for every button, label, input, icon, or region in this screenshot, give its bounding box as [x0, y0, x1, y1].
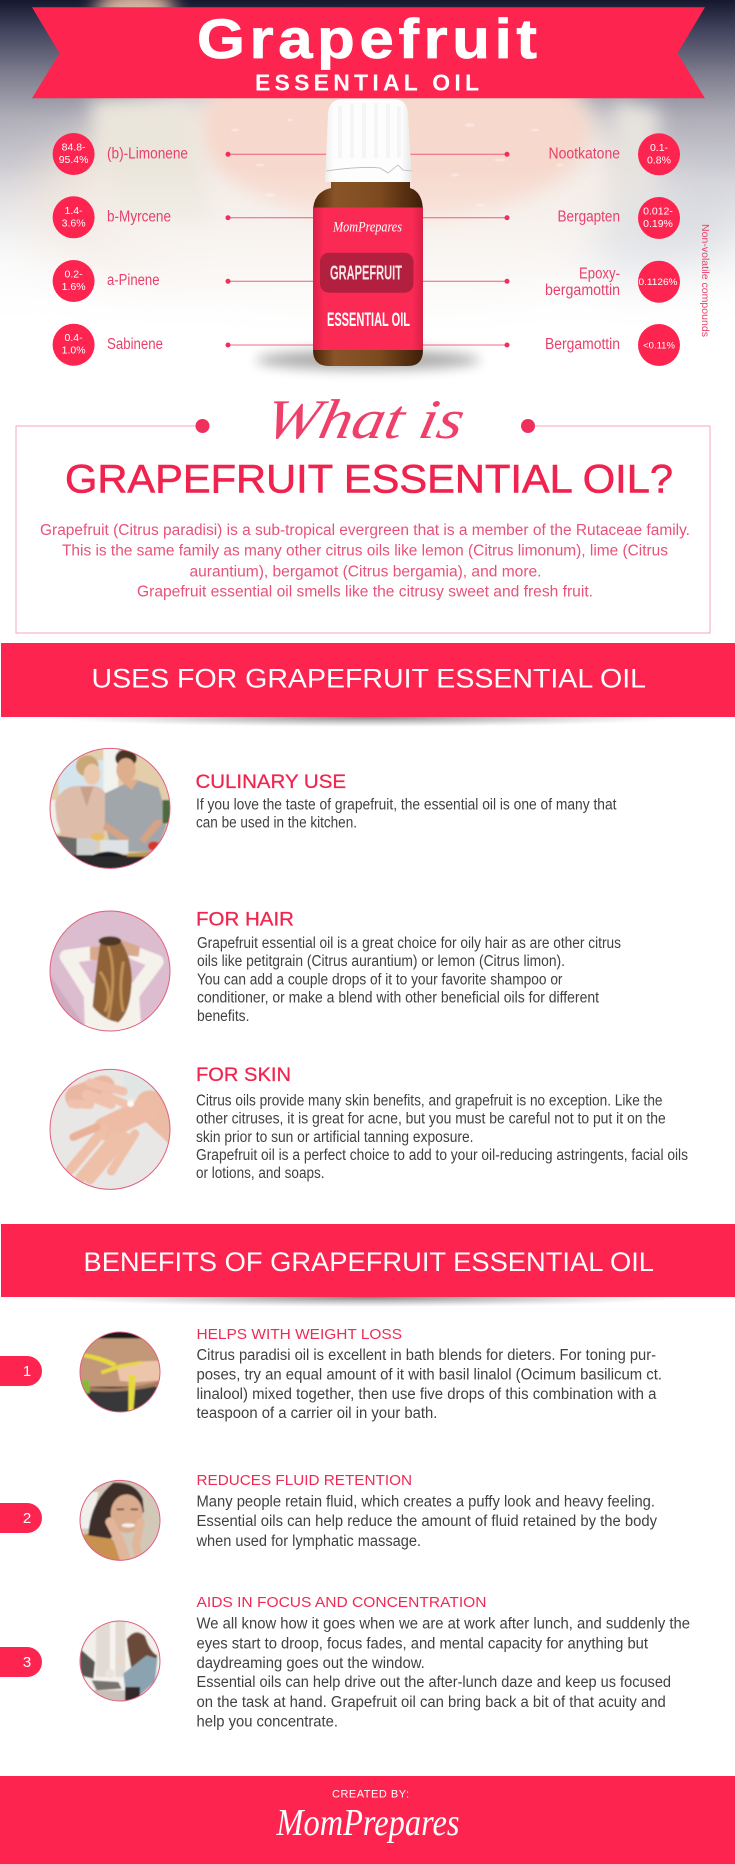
body text: when used for lymphatic massage.: [196, 1533, 421, 1550]
heading: HELPS WITH WEIGHT LOSS: [196, 1326, 402, 1343]
frame dot right: [521, 419, 535, 433]
compound: limonene: (b)-Limonene: [107, 146, 188, 162]
photo: hands applying cream: [50, 1068, 170, 1190]
benefit 3: focus: [0, 1594, 690, 1731]
compound: bergamottin: Bergamottin: [545, 336, 620, 353]
compound: bergamottin: <0.11%: [643, 340, 675, 352]
body text: [196, 1347, 662, 1422]
body text: on the task at hand. Grapefruit oil can bring back a bit of that acuity and: [196, 1694, 666, 1711]
bottle shadow: [256, 350, 480, 370]
photo: woman with long hair: [50, 910, 170, 1032]
body text: daydreaming goes out the window.: [196, 1655, 425, 1672]
frame dot left: [196, 419, 210, 433]
body text: Essential oils can help drive out the after-lunch daze and keep us focused: [196, 1674, 671, 1691]
body text: skin prior to sun or artificial tanning exposure.: [196, 1129, 474, 1146]
bottle sublabel: ESSENTIAL OIL: [327, 310, 410, 331]
compound: myrcene: 1.4-: [65, 205, 83, 217]
footer logo: MomPrepares: [276, 1802, 460, 1844]
use: culinary: [50, 748, 616, 869]
number tab: [0, 1647, 42, 1677]
bottle name plate: GRAPEFRUIT: [330, 262, 402, 284]
script heading: What is: [259, 390, 470, 451]
body text: eyes start to droop, focus fades, and mental capacity for anything but: [196, 1635, 649, 1652]
credit label: CREATED BY:: [332, 1788, 409, 1800]
compound: sabinene: 0.4-: [65, 332, 83, 344]
compound: pinene: a-Pinene: [107, 272, 160, 289]
paragraph: Grapefruit essential oil smells like the citrusy sweet and fresh fruit.: [137, 584, 593, 601]
compound: epoxybergamottin: Epoxy-: [579, 265, 620, 282]
compound: bergamottin: [545, 324, 680, 366]
photo: smiling woman: [80, 1480, 160, 1561]
compound: nootkatone: Nootkatone: [548, 146, 620, 162]
body text: other citruses, it is great for acne, but you must be careful not to put it on the: [196, 1111, 666, 1128]
body text: Many people retain fluid, which creates a puffy look and heavy feeling.: [196, 1494, 655, 1511]
body text: oils like petitgrain (Citrus aurantium) or lemon (Citrus limon).: [197, 953, 565, 970]
bottle name plate: [320, 253, 414, 293]
heading: FOR HAIR: [196, 910, 294, 931]
frame: [16, 426, 710, 633]
compound: sabinene: Sabinene: [107, 336, 163, 353]
number tab: 2: [23, 1510, 31, 1527]
body text: Citrus paradisi oil is excellent in bath blends for dieters. For toning pur-: [196, 1347, 656, 1364]
bottle cap: [325, 99, 412, 182]
connector lines from bottle to compounds: [226, 152, 510, 348]
title ribbon: [32, 7, 705, 98]
compound: limonene: 95.4%: [59, 154, 88, 166]
compound: nootkatone: 0.1-: [650, 142, 669, 154]
compound: myrcene: 3.6%: [62, 217, 86, 229]
body text: We all know how it goes when we are at work after lunch, and suddenly the: [196, 1616, 690, 1633]
bottle logo: MomPrepares: [332, 220, 402, 236]
banner shadow: benefits: [47, 1287, 687, 1307]
body text: [196, 1616, 690, 1731]
compound: epoxybergamottin: [545, 261, 680, 303]
body text: If you love the taste of grapefruit, the essential oil is one of many that: [196, 796, 617, 814]
compound: bergapten: Bergapten: [558, 209, 620, 226]
heading: FOR SKIN: [196, 1065, 291, 1086]
body text: [196, 1093, 688, 1182]
compound: bergapten: [558, 197, 680, 239]
bottle label: [313, 208, 423, 350]
bottle glass: [313, 178, 423, 366]
body text: Grapefruit oil is a perfect choice to add to your oil-reducing astringents, facial oils: [196, 1147, 688, 1164]
number tab: [0, 1503, 42, 1533]
compound: sabinene: 1.0%: [62, 345, 86, 357]
essential oil bottle: [313, 99, 423, 366]
footer: [0, 1776, 735, 1864]
body text: Essential oils can help reduce the amount of fluid retained by the body: [196, 1513, 657, 1530]
benefit 1: weight loss: [0, 1325, 662, 1425]
body text: help you concentrate.: [196, 1714, 338, 1731]
heading: AIDS IN FOCUS AND CONCENTRATION: [196, 1594, 486, 1611]
compound: myrcene: b-Myrcene: [107, 209, 171, 226]
body text: [197, 935, 621, 1025]
banner shadow: uses: [47, 707, 687, 727]
compound: limonene: [53, 133, 188, 175]
body text: can be used in the kitchen.: [196, 814, 357, 832]
heading: REDUCES FLUID RETENTION: [196, 1472, 412, 1489]
title: Grapefruit: [197, 9, 537, 70]
compound: bergapten: 0.19%: [643, 218, 673, 230]
compound: sabinene: [53, 324, 163, 366]
number tab: [0, 1356, 42, 1386]
compound: epoxybergamottin: bergamottin: [545, 282, 620, 299]
photo: couple cooking: [50, 748, 170, 869]
body text: Grapefruit essential oil is a great choice for oily hair as are other citrus: [197, 935, 621, 952]
paragraph: Grapefruit (Citrus paradisi) is a sub-tropical evergreen that is a member of the Rutaceae family.: [40, 522, 690, 539]
panel: what is: [16, 390, 710, 633]
compound: pinene: 1.6%: [62, 281, 86, 293]
number tab: 3: [23, 1654, 31, 1671]
heading: GRAPEFRUIT ESSENTIAL OIL?: [65, 458, 673, 502]
compound: bergapten: 0.012-: [643, 206, 673, 218]
body text: conditioner, or make a blend with other beneficial oils for different: [197, 990, 600, 1007]
banner: benefits: BENEFITS OF GRAPEFRUIT ESSENTIAL OIL: [84, 1247, 654, 1277]
paragraph: aurantium), bergamot (Citrus bergamia), and more.: [190, 564, 542, 580]
compounds right column: [545, 133, 680, 366]
body text: teaspoon of a carrier oil in your bath.: [196, 1405, 437, 1422]
body text: or lotions, and soaps.: [196, 1165, 324, 1182]
body text: You can add a couple drops of it to your favorite shampoo or: [197, 972, 562, 989]
use: hair: [50, 910, 620, 1032]
compound: nootkatone: [548, 133, 680, 175]
paragraph: [40, 522, 690, 601]
banner: uses: [1, 643, 735, 717]
banner: uses: USES FOR GRAPEFRUIT ESSENTIAL OIL: [92, 664, 646, 694]
compound: epoxybergamottin: 0.1126%: [638, 277, 678, 288]
compound: pinene: [53, 260, 160, 302]
body text: [196, 796, 617, 832]
compound: myrcene: [53, 196, 171, 238]
compound: nootkatone: 0.8%: [647, 154, 671, 166]
body text: Citrus oils provide many skin benefits, and grapefruit is no exception. Like the: [196, 1093, 662, 1110]
subtitle: ESSENTIAL OIL: [255, 70, 479, 96]
photo: woman working at desk: [80, 1620, 160, 1702]
body text: [196, 1494, 657, 1550]
use: skin: [50, 1067, 688, 1190]
banner: benefits: [1, 1224, 735, 1297]
benefit 2: fluid retention: [0, 1475, 657, 1561]
photo: measuring waist: [80, 1332, 160, 1412]
compound: limonene: 84.8-: [62, 142, 86, 154]
body text: poses, try an equal amount of it with basil linalol (Ocimum basilicum ct.: [196, 1367, 662, 1384]
heading: CULINARY USE: [196, 772, 346, 793]
hero background: blurred grapefruit photo: [0, 0, 735, 290]
body text: linalool) mixed together, then use five drops of this combination with a: [196, 1386, 657, 1403]
body text: benefits.: [197, 1008, 250, 1025]
compounds left column: [53, 133, 188, 366]
compound: pinene: 0.2-: [65, 268, 83, 280]
number tab: 1: [23, 1363, 31, 1380]
rotated note: Non-volatile compounds: [699, 224, 711, 337]
paragraph: This is the same family as many other citrus oils like lemon (Citrus limonum), lime (Citrus: [62, 543, 668, 560]
